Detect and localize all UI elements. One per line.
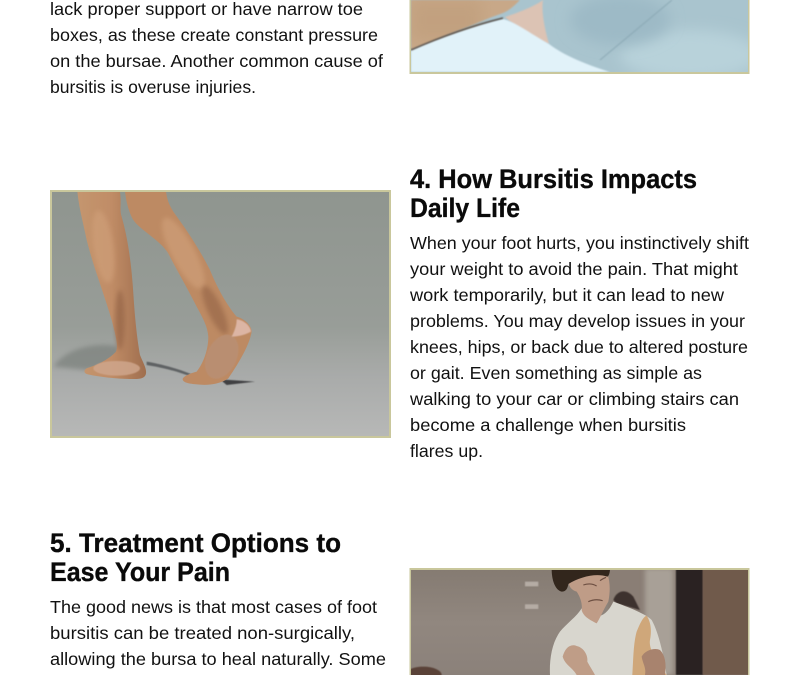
text block: impact on daily life: or gait. Even something as simple as bbox=[410, 363, 702, 383]
text block: causes of bursitis bbox=[50, 0, 383, 97]
text block: impact on daily life: knees, hips, or back due to altered posture bbox=[410, 337, 748, 357]
heading: 4. How Bursitis Impacts Daily Life: 4. How Bursitis Impacts bbox=[410, 164, 697, 194]
text block: impact on daily life: problems. You may develop issues in your bbox=[410, 311, 745, 331]
fist bbox=[563, 645, 595, 675]
left leg bbox=[77, 192, 146, 379]
shirt bbox=[550, 602, 667, 675]
photo: bare legs and feet stepping on grey floor bbox=[50, 190, 391, 438]
text block: treatment options: The good news is that most cases of foot bbox=[50, 597, 377, 617]
text block: impact on daily life: become a challenge when bursitis bbox=[410, 415, 686, 435]
text block: impact on daily life: walking to your car or climbing stairs can bbox=[409, 389, 739, 409]
text block: impact on daily life: When your foot hurts, you instinctively shift bbox=[410, 233, 749, 253]
text block: impact on daily life bbox=[409, 233, 749, 461]
text block: impact on daily life: your weight to avoid the pain. That might bbox=[410, 259, 738, 279]
foot held upright bbox=[632, 616, 667, 675]
photo: person resting foot on pale blue surface bbox=[410, 0, 750, 74]
heading: 5. Treatment Options to Ease Your Pain: Ease Your Pain bbox=[50, 557, 230, 587]
supporting hand bbox=[642, 649, 666, 675]
text block: impact on daily life: work temporarily, but it can lead to new bbox=[409, 285, 724, 305]
text block: causes of bursitis: bursitis is overuse injuries. bbox=[50, 77, 256, 97]
text block: treatment options: allowing the bursa to heal naturally. Some bbox=[50, 649, 386, 669]
text block: treatment options: bursitis can be treated non-surgically, bbox=[50, 623, 355, 643]
heading: 5. Treatment Options to Ease Your Pain bbox=[50, 528, 341, 587]
text block: treatment options bbox=[50, 597, 386, 669]
text block: causes of bursitis: boxes, as these create constant pressure bbox=[50, 25, 378, 45]
text block: impact on daily life: flares up. bbox=[410, 441, 483, 461]
heading: 5. Treatment Options to Ease Your Pain: 5. Treatment Options to bbox=[50, 528, 341, 558]
right leg bbox=[125, 192, 252, 385]
heading: 4. How Bursitis Impacts Daily Life bbox=[410, 164, 697, 223]
photo: therapist treating a patient's foot bbox=[405, 568, 750, 675]
heading: 4. How Bursitis Impacts Daily Life: Daily Life bbox=[410, 193, 520, 223]
neck and face bbox=[568, 571, 610, 623]
hair bbox=[552, 569, 610, 592]
text block: causes of bursitis: on the bursae. Another common cause of bbox=[50, 51, 383, 71]
